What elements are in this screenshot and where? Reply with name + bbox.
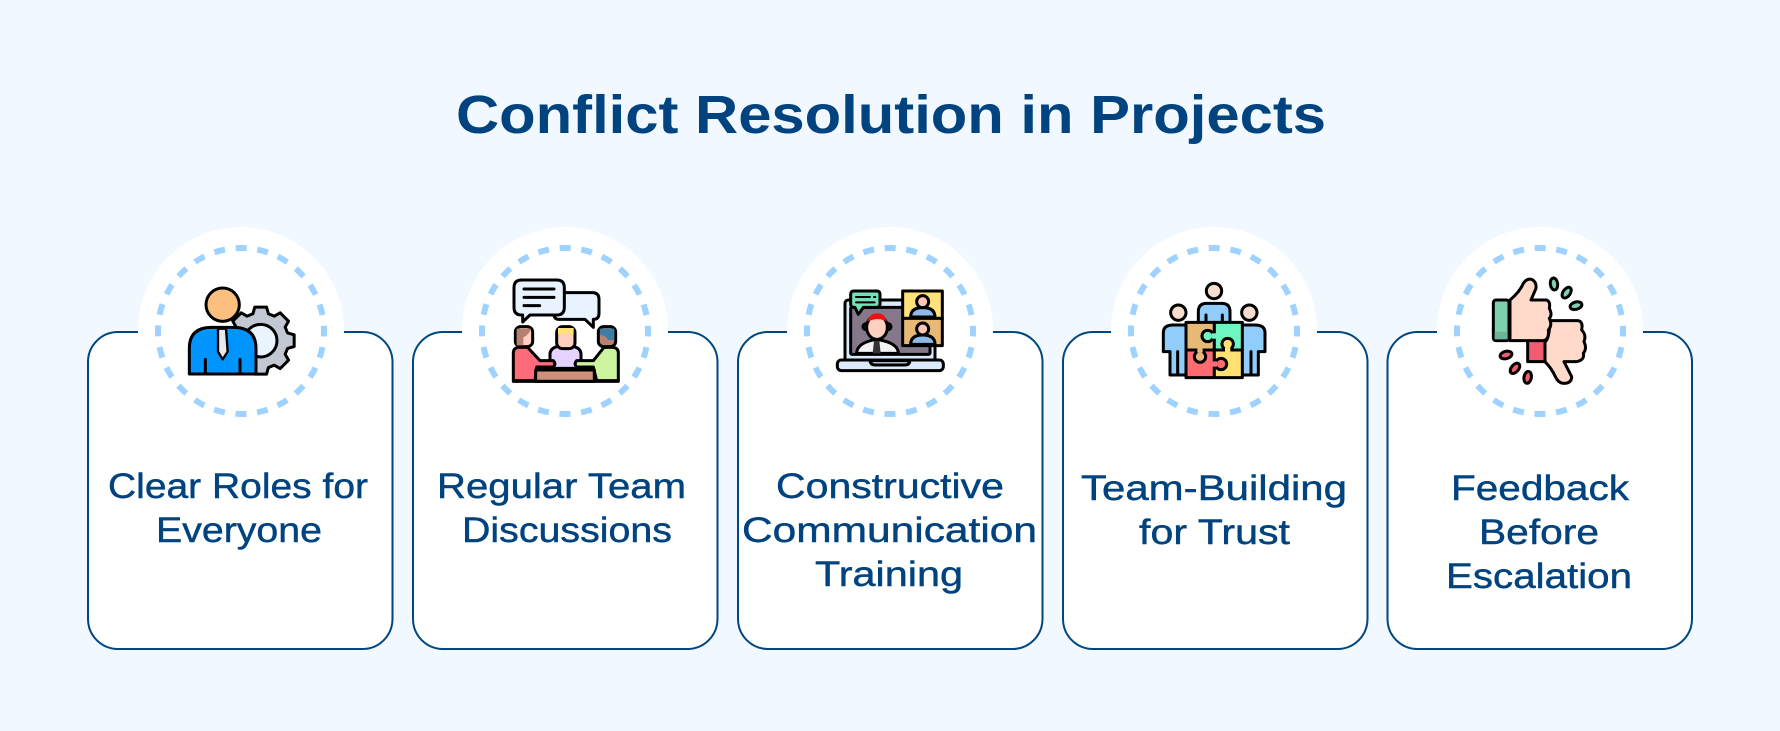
panel: communication training bbox=[738, 227, 1042, 649]
card text: clear roles: Clear Roles for bbox=[108, 467, 368, 506]
card text: team building: for Trust bbox=[1139, 513, 1290, 552]
card text: communication training: Training bbox=[815, 555, 963, 594]
icon: team with puzzle bbox=[1163, 283, 1265, 378]
card text: communication training: Constructive bbox=[776, 467, 1004, 506]
card text: feedback: Before bbox=[1479, 513, 1599, 552]
card text: feedback bbox=[1446, 469, 1632, 596]
panel: clear roles bbox=[88, 227, 392, 649]
card text: team discussions bbox=[437, 467, 686, 550]
icon: thumbs up and down bbox=[1493, 278, 1586, 384]
panel: team discussions bbox=[413, 227, 718, 649]
icon: team meeting with speech bubbles bbox=[513, 280, 618, 381]
title: Conflict Resolution in Projects bbox=[456, 85, 1326, 145]
card text: team discussions: Discussions bbox=[462, 511, 672, 550]
card text: communication training: Communication bbox=[742, 511, 1037, 550]
icon: person with gear bbox=[189, 288, 294, 374]
panel: feedback bbox=[1388, 227, 1692, 649]
card text: clear roles bbox=[108, 467, 368, 550]
card text: team building: Team-Building bbox=[1081, 469, 1347, 508]
card text: team building bbox=[1081, 469, 1347, 552]
card text: communication training bbox=[742, 467, 1037, 594]
card text: team discussions: Regular Team bbox=[437, 467, 686, 506]
card text: feedback: Feedback bbox=[1451, 469, 1630, 508]
panel: team building bbox=[1063, 227, 1368, 649]
icon: laptop video call bbox=[837, 291, 943, 371]
card text: feedback: Escalation bbox=[1446, 557, 1632, 596]
card text: clear roles: Everyone bbox=[156, 511, 322, 550]
